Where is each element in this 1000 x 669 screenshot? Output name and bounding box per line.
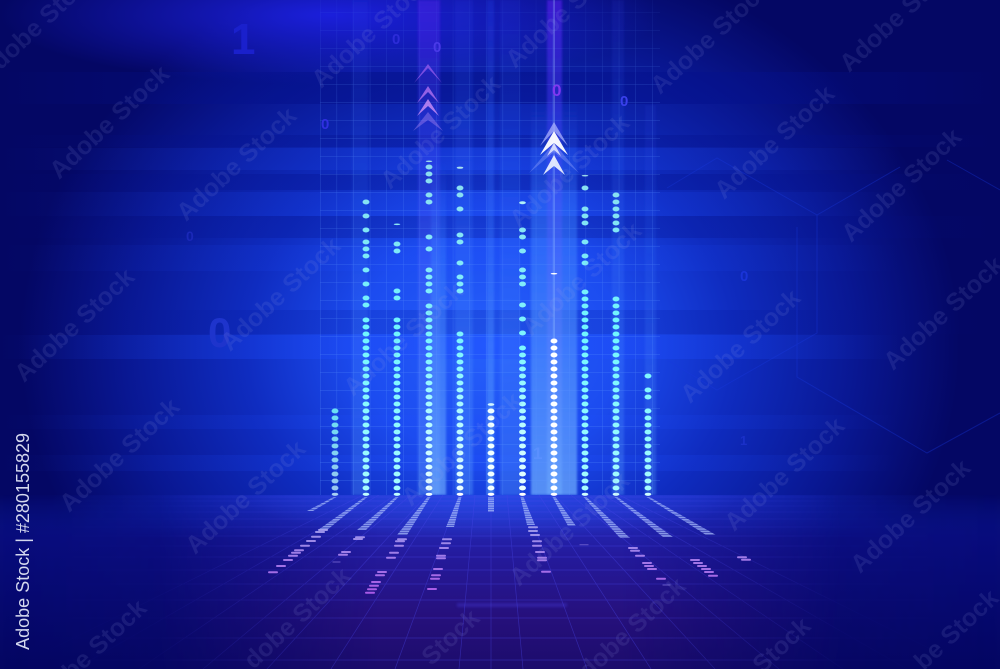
top blue haze — [0, 0, 760, 90]
watermarks: Adobe Stock — [836, 123, 967, 247]
watermarks: Adobe Stock — [215, 232, 346, 356]
watermarks: Adobe Stock — [44, 60, 175, 184]
watermarks: Adobe Stock — [516, 217, 647, 341]
column 5 — [457, 167, 463, 496]
faint binary digits: 0 — [620, 93, 628, 110]
watermarks: Adobe Stock — [675, 284, 806, 408]
watermarks: Adobe Stock — [338, 277, 469, 401]
faint binary digits: 1 — [231, 15, 255, 64]
column 4 — [426, 160, 432, 496]
dim reflection dashes — [333, 545, 670, 585]
column 1 — [332, 410, 338, 496]
watermarks: Adobe Stock — [171, 102, 302, 226]
faint binary digits — [186, 15, 748, 463]
watermarks: Adobe Stock — [504, 467, 635, 591]
watermarks: Adobe Stock — [504, 109, 635, 233]
faint binary digits: 1 — [740, 433, 747, 448]
faint binary digits: 0 — [186, 228, 194, 244]
watermarks: Adobe Stock — [709, 80, 840, 204]
chart: dotted columns — [332, 160, 651, 496]
column 2 — [363, 202, 369, 496]
column 3 — [394, 224, 400, 496]
faint binary digits: 0 — [552, 81, 561, 100]
floor grid — [174, 495, 826, 669]
watermarks: Adobe Stock — [180, 435, 311, 559]
column 8 — [551, 273, 557, 496]
faint binary digits: 1 — [533, 444, 542, 463]
partial watermarks at the bottom edge — [46, 562, 1000, 669]
column 11 — [645, 376, 651, 496]
background grid — [320, 0, 660, 495]
column 9 — [582, 175, 588, 496]
column 6 — [488, 403, 494, 496]
column 10 — [613, 195, 619, 496]
watermarks: Adobe Stock — [9, 263, 140, 387]
watermarks: Adobe Stock — [396, 387, 527, 511]
watermarks: Adobe Stock — [719, 412, 850, 536]
faint hexagon outlines — [667, 158, 1000, 453]
faint binary digits: 0 — [433, 39, 441, 56]
arrow: purple chevrons — [413, 64, 443, 131]
watermarks: Adobe Stock — [845, 454, 976, 578]
watermarks: Adobe Stock — [375, 70, 506, 194]
faint binary digits: 0 — [208, 309, 231, 356]
stock id label: Adobe Stock | #280155829 — [13, 433, 33, 650]
faint binary digits: 0 — [321, 116, 329, 133]
vertical light streaks — [352, 0, 656, 495]
horizontal light bands — [0, 72, 1000, 471]
scattered purple reflection dashes — [269, 527, 750, 593]
faint binary digits: 0 — [740, 268, 748, 285]
perspective floor — [0, 495, 1000, 669]
arrow: white chevrons — [529, 122, 579, 175]
faint binary digits: 0 — [392, 31, 400, 48]
thin center light line — [553, 0, 555, 495]
reflected bars on floor — [307, 497, 716, 538]
watermarks: Adobe Stock — [54, 393, 185, 517]
partial watermarks at the bottom edge: Stock — [416, 604, 485, 669]
column 7 — [519, 201, 526, 496]
